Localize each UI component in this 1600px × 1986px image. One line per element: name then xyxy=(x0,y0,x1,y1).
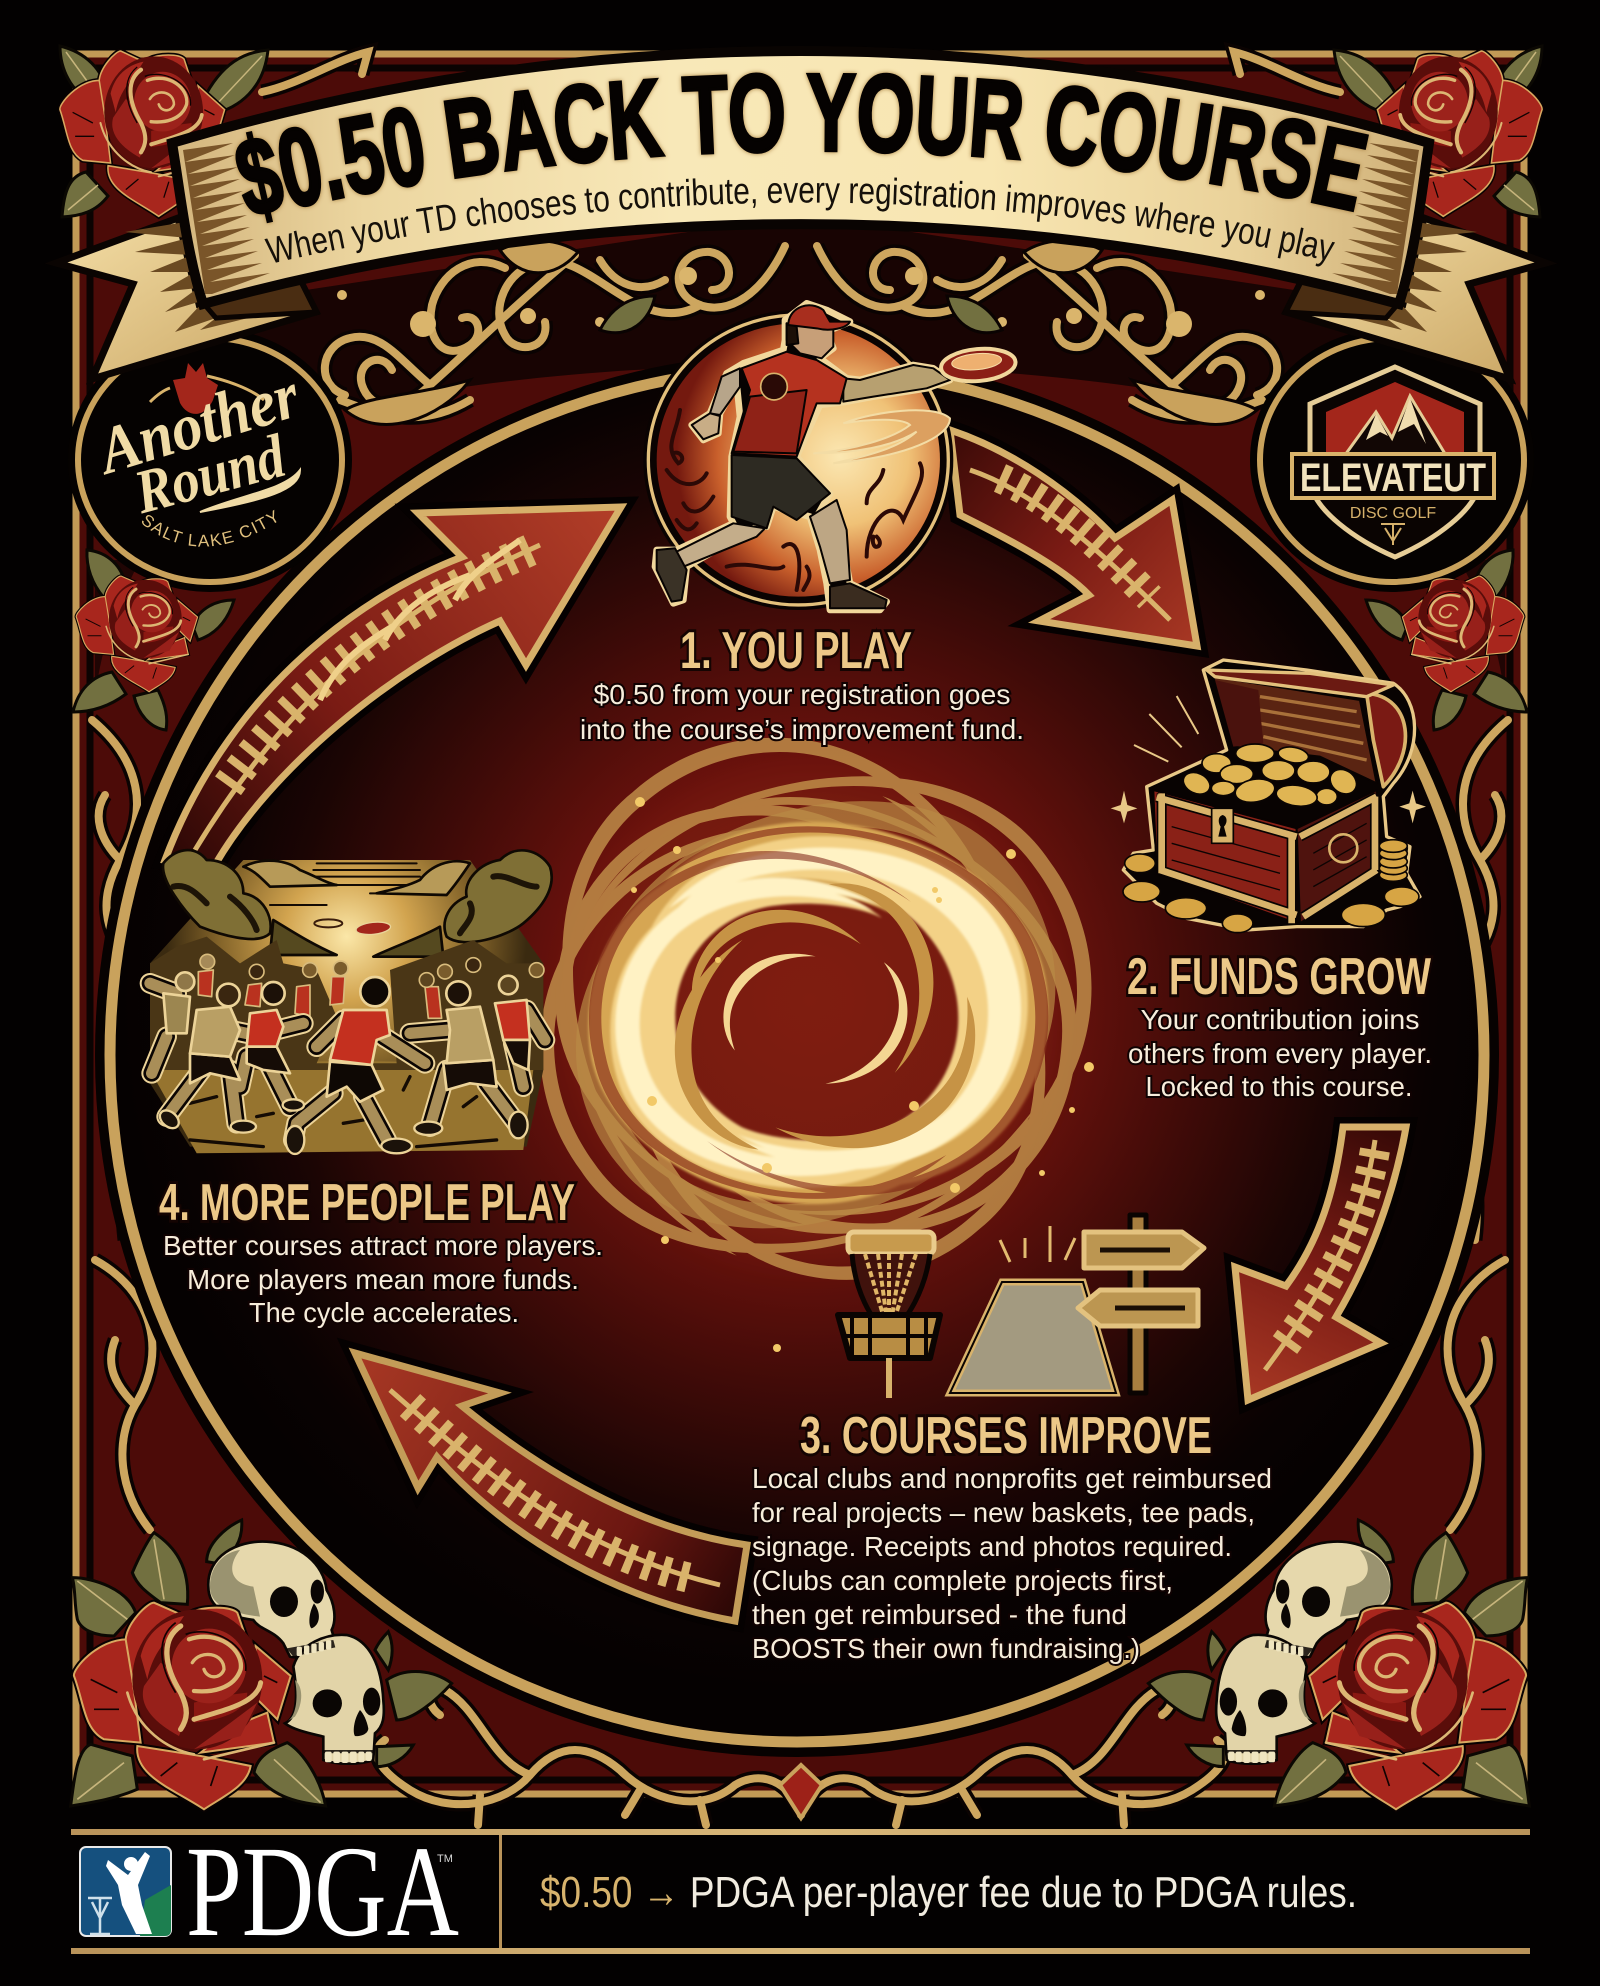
logo: ElevateUT: ELEVATEUT xyxy=(1300,456,1486,500)
logo: Another Round: Round xyxy=(127,422,293,527)
PDGA logo mark xyxy=(80,1847,171,1936)
gold coins xyxy=(1180,744,1361,809)
corner: rose and skulls bottom right xyxy=(1148,1520,1529,1809)
trees xyxy=(163,850,552,957)
arrow: 4 to 1 xyxy=(165,507,621,865)
logo: ElevateUT: DISC GOLF xyxy=(1350,505,1436,522)
ribbon hatch right xyxy=(1332,143,1419,294)
illustration: crowd scene xyxy=(150,850,552,1154)
tree trunks and far crowd xyxy=(150,937,543,1070)
text: step 1 body: $0.50 from your registration goes xyxy=(594,679,1010,710)
illustration: disc golf basket xyxy=(838,1232,940,1398)
central swirl xyxy=(485,675,1145,1352)
text: step 3 body: for real projects – new baskets, tee pads, xyxy=(752,1497,1255,1528)
player bodies xyxy=(163,972,530,1102)
loose coins xyxy=(1123,840,1419,933)
text: step 1 body: into the course’s improvement fund. xyxy=(580,714,1024,745)
text: step 2 body: Locked to this course. xyxy=(1146,1071,1412,1102)
text: step 3 body: Local clubs and nonprofits get reimbursed xyxy=(752,1463,1272,1494)
logo: Another Round: Another xyxy=(87,358,309,489)
text: step 3 body: BOOSTS their own fundraising.) xyxy=(752,1633,1140,1664)
arrow: 1 to 2 xyxy=(950,430,1197,646)
chest lid xyxy=(1207,670,1405,787)
text: step 4 body: More players mean more funds. xyxy=(187,1264,579,1295)
illustration: sign post xyxy=(1078,1215,1204,1393)
far players xyxy=(198,954,544,1018)
illustration: treasure chest xyxy=(1111,660,1426,933)
icon: rose top right xyxy=(1334,46,1542,217)
illustration: disc thrower xyxy=(648,303,1017,610)
ribbon body xyxy=(172,51,1429,304)
icon: rose middle left xyxy=(73,550,234,730)
sky and ground xyxy=(150,860,543,1153)
text: step 4 body: Better courses attract more players. xyxy=(163,1230,603,1261)
player shoes xyxy=(156,1099,528,1154)
illustration: tee pad xyxy=(950,1226,1116,1393)
logo: Another Round: SALT LAKE CITY xyxy=(142,510,276,547)
text: step 3 body: signage. Receipts and photos required. xyxy=(752,1531,1232,1562)
subtitle: When your TD chooses to contribute, every registration improves where you play xyxy=(264,178,1335,266)
text: step 2 body: others from every player. xyxy=(1128,1038,1432,1069)
player silhouette xyxy=(655,303,950,610)
player limbs outline xyxy=(150,983,545,1140)
panel: central circle xyxy=(107,365,1487,1745)
heading: step 2: 2. FUNDS GROW xyxy=(1127,948,1432,1006)
arrow: 2 to 3 xyxy=(1235,1127,1406,1400)
ribbon hatch left xyxy=(183,143,270,294)
ribbon tail: left xyxy=(56,218,316,379)
icon: rose top left xyxy=(60,46,268,217)
player limbs xyxy=(150,983,545,1140)
logo: Another Round xyxy=(72,334,352,592)
chest box xyxy=(1153,790,1378,923)
corner: rose and skulls bottom left xyxy=(71,1520,452,1809)
panel: footer xyxy=(71,1820,1530,1964)
title: $0.50 BACK TO YOUR COURSE xyxy=(233,70,1371,225)
text: step 2 body: Your contribution joins xyxy=(1140,1004,1420,1035)
arrow: 3 to 4 xyxy=(355,1353,747,1621)
text: step 4 body: The cycle accelerates. xyxy=(249,1297,519,1328)
text: step 3 body: then get reimbursed - the fund xyxy=(752,1599,1127,1630)
sparkles xyxy=(1111,791,1426,823)
flying disc xyxy=(940,346,1017,384)
ribbon tail: right xyxy=(1286,218,1546,379)
panel: banner ribbon xyxy=(68,50,1534,384)
heading: step 3: 3. COURSES IMPROVE xyxy=(800,1407,1212,1465)
flying discs xyxy=(314,919,391,936)
trademark: TM xyxy=(437,1853,453,1865)
tree shadows xyxy=(173,876,537,933)
logo: ElevateUT xyxy=(1258,336,1526,584)
heading: step 1: 1. YOU PLAY xyxy=(680,622,912,680)
disc swoosh xyxy=(813,410,950,463)
chest sticker outline xyxy=(1123,660,1420,930)
heading: step 4: 4. MORE PEOPLE PLAY xyxy=(159,1174,575,1232)
text: step 3 body: (Clubs can complete projects first, xyxy=(752,1565,1173,1596)
icon: rose middle right xyxy=(1366,550,1527,730)
footer note: $0.50 → PDGA per-player fee due to PDGA rules. xyxy=(540,1868,1357,1917)
PDGA wordmark: PDGA xyxy=(186,1820,459,1964)
